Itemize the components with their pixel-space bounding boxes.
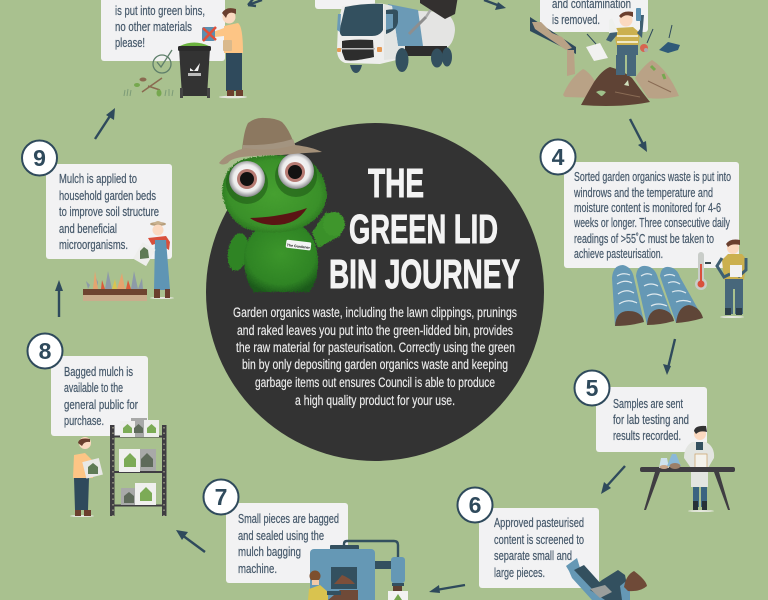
step text: is put into green bins, xyxy=(115,4,205,18)
intro text block: and raked leaves you put into the green-lidded bin, provides xyxy=(237,323,513,338)
title xyxy=(329,160,520,297)
text box xyxy=(315,0,375,9)
step text xyxy=(494,516,584,580)
intro text block xyxy=(233,305,517,408)
arrow: step 4 to 5 xyxy=(663,339,675,375)
icon: collection truck xyxy=(337,0,458,73)
text box xyxy=(540,0,648,32)
step text: to improve soil structure xyxy=(59,205,159,219)
step text: Mulch is applied to xyxy=(59,172,137,186)
icon: lab table xyxy=(640,467,735,510)
icon: screening machine xyxy=(566,558,647,600)
text box xyxy=(226,503,348,583)
title: THE xyxy=(368,160,424,206)
arrow: step 5 to 6 xyxy=(601,466,625,494)
icon: tick and garden waste xyxy=(124,50,173,96)
icon: wheelie bin xyxy=(178,42,211,98)
step text: content is screened to xyxy=(494,533,584,547)
panel: step 4 windrows xyxy=(540,140,747,326)
step text: mulch bagging xyxy=(238,545,301,559)
step text: results recorded. xyxy=(613,429,681,443)
step text: separate small and xyxy=(494,549,572,563)
step text: no other materials xyxy=(115,20,192,34)
title: GREEN LID xyxy=(349,206,498,252)
icon: compost piles xyxy=(563,60,679,106)
icon: person with rejected bag xyxy=(202,8,247,98)
icon: sorting worker xyxy=(606,8,644,76)
step text xyxy=(59,172,159,252)
mascot: The Gardener xyxy=(286,243,311,250)
arrow: step 8 to 9 xyxy=(55,280,63,317)
number badge xyxy=(540,140,576,174)
panel: step 2 truck xyxy=(315,0,458,73)
panel: step 1 green bins xyxy=(101,0,247,98)
intro text block: bin by only depositing garden organics waste and keeping xyxy=(242,357,508,372)
step text: and sealed using the xyxy=(238,529,324,543)
panel: step 9 garden beds xyxy=(22,140,174,301)
step text xyxy=(613,397,689,443)
icon: scientist xyxy=(684,426,714,512)
number badge xyxy=(28,334,62,368)
step text xyxy=(64,365,138,428)
icon: gardener xyxy=(133,221,174,299)
panel: step 6 screening xyxy=(458,488,647,600)
intro text block: garbage items out ensures Council is able to produce xyxy=(255,375,495,390)
icon: conveyor xyxy=(530,17,576,76)
step text: Approved pasteurised xyxy=(494,516,584,530)
mascot xyxy=(219,118,345,292)
number badge xyxy=(22,140,57,176)
text box xyxy=(51,356,148,436)
intro text block: a high quality product for your use. xyxy=(295,393,455,408)
icon: customer xyxy=(70,437,103,517)
step text: general public for xyxy=(64,398,138,412)
icon: windrows xyxy=(612,265,703,326)
text box xyxy=(101,0,225,61)
step text xyxy=(238,512,339,576)
icon: garden bed xyxy=(83,271,147,301)
step text: readings of >55˚C must be taken to xyxy=(574,232,714,246)
text box xyxy=(596,387,707,452)
arrow: step 2 to 3 xyxy=(484,0,506,10)
step text: microorganisms. xyxy=(59,238,128,252)
step text: for lab testing and xyxy=(613,413,689,427)
panel: step 5 lab testing xyxy=(574,370,735,512)
text box xyxy=(46,164,172,259)
icon: thermometer xyxy=(695,252,711,290)
icon: machine operator xyxy=(308,570,341,600)
central dark circle panel xyxy=(206,123,544,461)
step text: Bagged mulch is xyxy=(64,365,133,379)
number badge xyxy=(458,488,492,522)
step text xyxy=(552,0,631,27)
step text: large pieces. xyxy=(494,566,545,580)
step text: windrows and the temperature and xyxy=(573,186,713,200)
icon: worker xyxy=(717,240,747,318)
step text xyxy=(115,4,205,50)
icon: removed contaminants xyxy=(586,25,680,61)
step text: household garden beds xyxy=(59,189,156,203)
step text: machine. xyxy=(238,562,277,576)
icon: shelves with bags xyxy=(110,418,166,517)
text box xyxy=(564,162,739,268)
title: BIN JOURNEY xyxy=(329,251,520,297)
step text: Samples are sent xyxy=(613,397,683,411)
step text: purchase. xyxy=(64,414,104,428)
panel: step 3 sorting xyxy=(530,0,680,106)
icon: flasks xyxy=(659,454,681,469)
number badge: 6 xyxy=(469,492,481,518)
arrow: step 3 to 4 xyxy=(630,119,647,152)
arrow: step 7 to 8 xyxy=(176,530,205,552)
text box xyxy=(479,508,599,588)
step text: available to the xyxy=(64,381,123,395)
step text: Small pieces are bagged xyxy=(238,512,339,526)
panel: step 8 retail xyxy=(28,334,166,517)
number badge xyxy=(574,370,610,406)
step text: please! xyxy=(115,36,145,50)
panel: step 7 bagging machine xyxy=(204,480,408,600)
arrow: step 9 to 1 xyxy=(95,108,115,139)
number badge: 5 xyxy=(586,375,599,401)
intro text block: the raw material for pasteurisation. Correctly using the green xyxy=(236,340,515,355)
number badge: 9 xyxy=(33,145,46,171)
step text: and beneficial xyxy=(59,222,117,236)
step text: achieve pasteurisation. xyxy=(574,247,663,261)
number badge xyxy=(204,480,238,514)
number badge: 8 xyxy=(39,338,52,364)
step text: is removed. xyxy=(552,13,600,27)
intro text block: Garden organics waste, including the lawn clippings, prunings xyxy=(233,305,517,320)
number badge: 4 xyxy=(552,144,565,170)
number badge: 7 xyxy=(215,484,227,510)
icon: bagging machine xyxy=(310,541,408,600)
arrow: step 6 to 7 xyxy=(429,585,465,593)
arrow: step 1 to 2 xyxy=(248,0,262,6)
step text xyxy=(573,170,731,261)
